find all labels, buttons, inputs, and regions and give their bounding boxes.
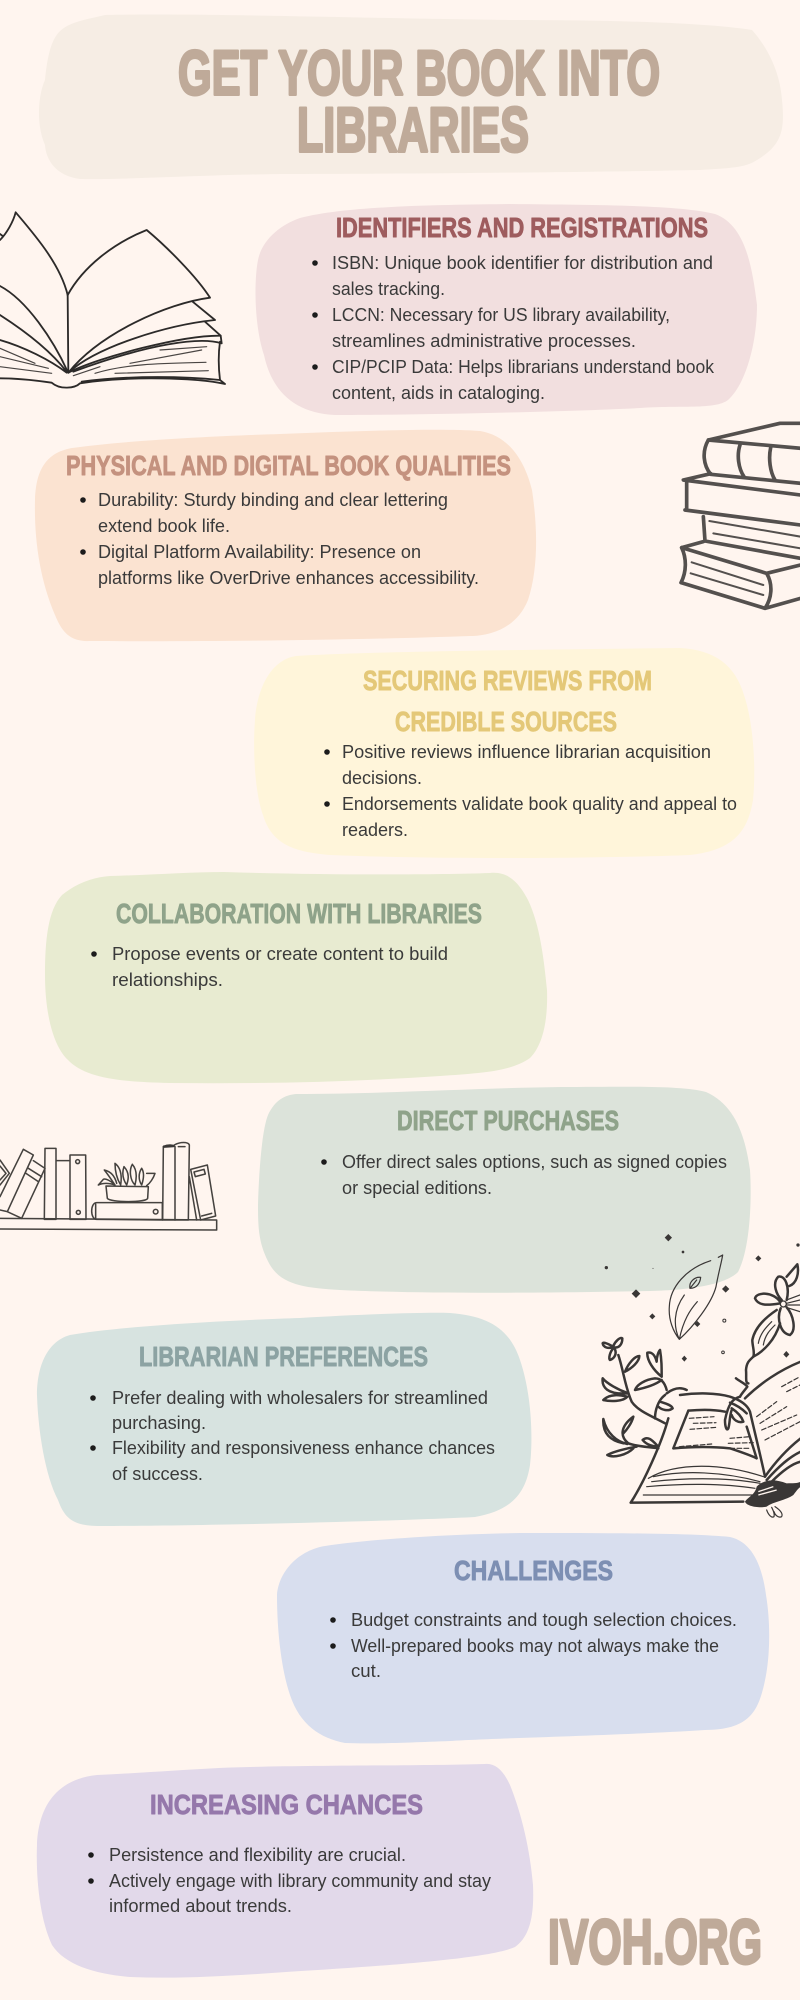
bullet list (312, 253, 715, 403)
bullet list: Budget constraints and tough selection choices. (351, 1610, 737, 1630)
bullet list: Positive reviews influence librarian acquisition (342, 742, 711, 762)
heading: PHYSICAL AND DIGITAL BOOK QUALITIES (66, 450, 511, 481)
bullet list: sales tracking. (332, 279, 445, 299)
bullet list: Endorsements validate book quality and appeal to (342, 794, 737, 814)
panel: direct purchases (258, 1087, 751, 1293)
icon: open book with flowers (603, 1234, 800, 1517)
bullet list: informed about trends. (109, 1896, 292, 1916)
heading: IDENTIFIERS AND REGISTRATIONS (336, 212, 708, 243)
panel: collaboration with libraries (45, 872, 547, 1083)
bullet list: Offer direct sales options, such as signed copies (342, 1152, 727, 1172)
flower (755, 1264, 798, 1335)
bullet list: Actively engage with library community and stay (109, 1871, 491, 1891)
heading: CREDIBLE SOURCES (395, 706, 617, 737)
heading: COLLABORATION WITH LIBRARIES (116, 898, 482, 929)
bullet list: of success. (112, 1464, 203, 1484)
bullet list (324, 742, 737, 840)
bullet list: purchasing. (112, 1413, 206, 1433)
book body (631, 1418, 743, 1503)
panel: challenges (277, 1533, 769, 1743)
bullet list: LCCN: Necessary for US library availability, (332, 305, 670, 325)
heading: LIBRARIAN PREFERENCES (139, 1341, 428, 1372)
bullet list (91, 944, 448, 990)
bullet list: decisions. (342, 768, 422, 788)
bullet list: Propose events or create content to build (112, 944, 448, 964)
panel: securing reviews (254, 648, 754, 858)
vines (618, 1355, 665, 1423)
bullet list: content, aids in cataloging. (332, 383, 545, 403)
bullet list: Well-prepared books may not always make the (351, 1636, 719, 1656)
bullet list: relationships. (112, 970, 223, 990)
bullet list: ISBN: Unique book identifier for distribution and (332, 253, 713, 273)
bullet list (330, 1610, 737, 1681)
bullet list: Persistence and flexibility are crucial. (109, 1845, 406, 1865)
heading: SECURING REVIEWS FROM (363, 665, 652, 696)
bullet list: Digital Platform Availability: Presence on (98, 542, 421, 562)
bullet list: CIP/PCIP Data: Helps librarians understand book (332, 357, 715, 377)
bullet list (88, 1845, 491, 1916)
icon: stack of books (681, 423, 800, 608)
bullet list (80, 490, 479, 588)
bullet list (90, 1388, 495, 1484)
bullet list: streamlines administrative processes. (332, 331, 636, 351)
icon: bookshelf (0, 1142, 217, 1230)
title banner: LIBRARIES (297, 96, 529, 166)
title banner (39, 15, 783, 179)
panel: librarian preferences (37, 1313, 531, 1526)
icon: open book (0, 212, 225, 388)
bullet list: cut. (351, 1661, 381, 1681)
panel: identifiers and registrations (256, 204, 757, 415)
panel: increasing chances (37, 1764, 533, 1978)
bullet list (321, 1152, 727, 1198)
bullet list: Prefer dealing with wholesalers for streamlined (112, 1388, 488, 1408)
bullet list: readers. (342, 820, 408, 840)
bullet list: extend book life. (98, 516, 230, 536)
heading: INCREASING CHANCES (150, 1789, 423, 1820)
bullet list: Flexibility and responsiveness enhance chances (112, 1438, 495, 1458)
leaf (669, 1255, 723, 1339)
heading: DIRECT PURCHASES (397, 1105, 619, 1136)
bullet list: or special editions. (342, 1178, 492, 1198)
heading (363, 665, 652, 737)
bullet list: platforms like OverDrive enhances accessibility. (98, 568, 479, 588)
panel: physical and digital book qualities (35, 430, 536, 641)
bullet list: Durability: Sturdy binding and clear lettering (98, 490, 448, 510)
heading: CHALLENGES (454, 1555, 613, 1586)
